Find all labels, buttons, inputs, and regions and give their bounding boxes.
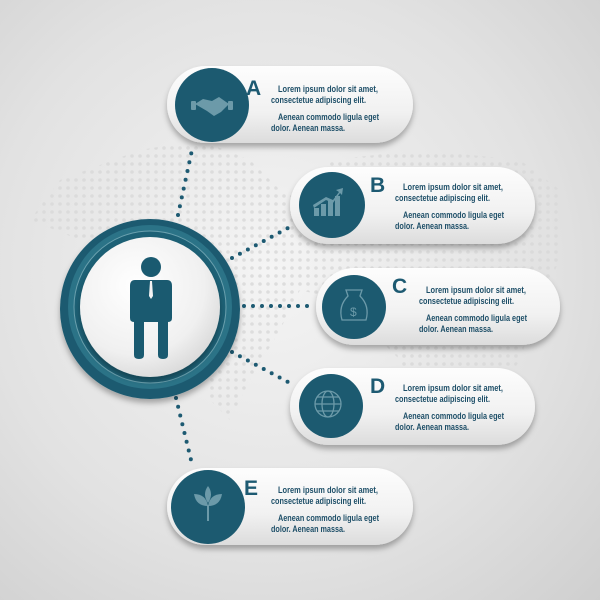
icon: money bag (341, 290, 367, 320)
panel E: Lorem ipsum dolor sit amet, (278, 485, 378, 496)
panel A: consectetue adipiscing elit. (271, 95, 366, 106)
icon: money bag: $ (350, 305, 357, 319)
central circle with person (60, 219, 240, 399)
icon: globe (315, 391, 341, 417)
panel B: dolor. Aenean massa. (395, 221, 469, 232)
panel C: consectetue adipiscing elit. (419, 296, 514, 307)
panel A: Lorem ipsum dolor sit amet, (278, 84, 378, 95)
panel B: consectetue adipiscing elit. (395, 193, 490, 204)
panel C: Aenean commodo ligula eget (426, 313, 528, 324)
panel A (167, 66, 413, 143)
panel E: E (244, 477, 258, 500)
panel C (316, 268, 560, 345)
background world map dots (30, 140, 560, 440)
panel D: consectetue adipiscing elit. (395, 394, 490, 405)
panel C: dolor. Aenean massa. (419, 324, 493, 335)
panel E: consectetue adipiscing elit. (271, 496, 366, 507)
icon: person (130, 257, 172, 359)
panel B: Aenean commodo ligula eget (403, 210, 505, 221)
panel C: Lorem ipsum dolor sit amet, (426, 285, 526, 296)
panel B: Lorem ipsum dolor sit amet, (403, 182, 503, 193)
panel E: Aenean commodo ligula eget (278, 513, 380, 524)
panel D: Lorem ipsum dolor sit amet, (403, 383, 503, 394)
panel D: Aenean commodo ligula eget (403, 411, 505, 422)
panel B (290, 167, 535, 244)
icon: handshake (191, 97, 233, 116)
icon: growth chart (313, 188, 343, 216)
icon: plant (194, 486, 222, 521)
panel B: B (370, 174, 385, 197)
panel D (290, 368, 535, 445)
panel E (167, 468, 413, 545)
panel E: dolor. Aenean massa. (271, 524, 345, 535)
panel D: D (370, 375, 385, 398)
panel A: dolor. Aenean massa. (271, 123, 345, 134)
connector dotted lines (176, 150, 316, 464)
panel D: dolor. Aenean massa. (395, 422, 469, 433)
panel A: Aenean commodo ligula eget (278, 112, 380, 123)
panel A: A (246, 77, 261, 100)
panel C: C (392, 275, 407, 298)
